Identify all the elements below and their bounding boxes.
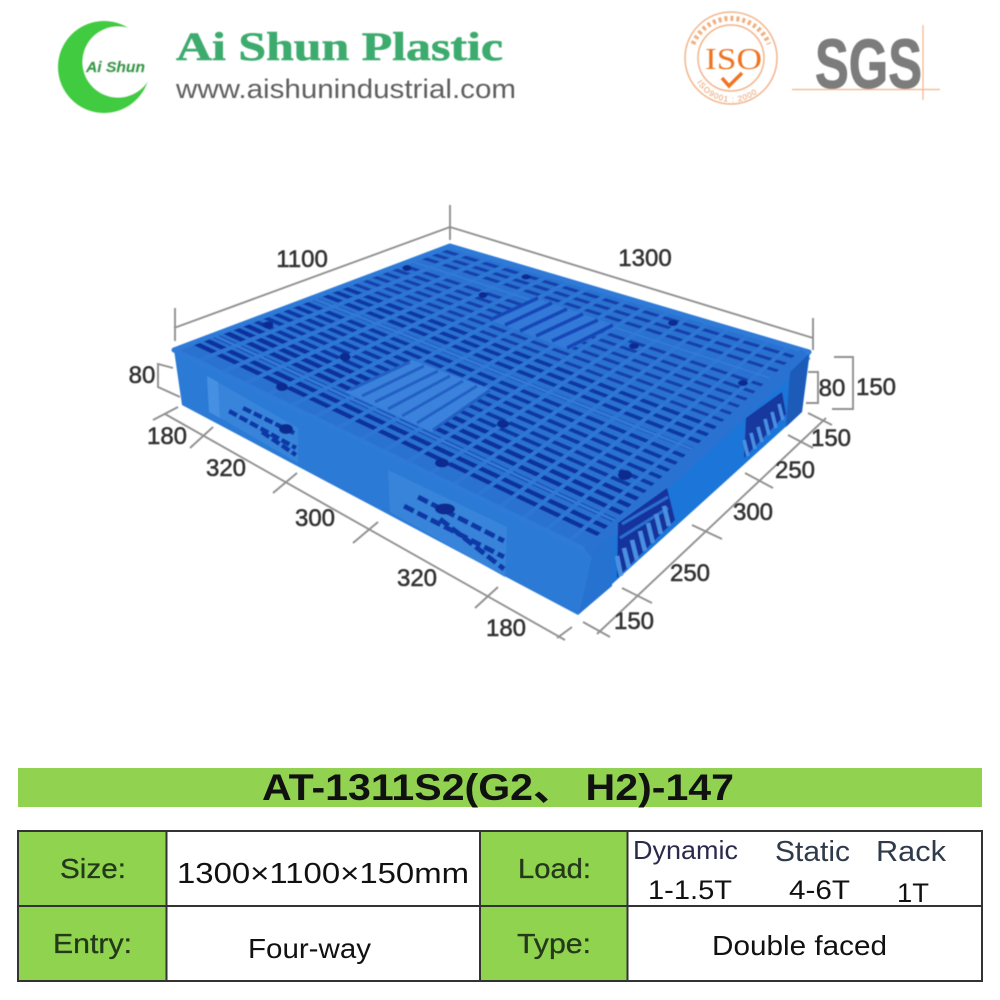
load row xyxy=(518,835,947,908)
website address: www.aishunindustrial.com xyxy=(175,74,516,104)
label cell backgrounds xyxy=(18,831,628,981)
load row: 1-1.5T xyxy=(648,875,732,905)
right deck rim band xyxy=(588,354,806,553)
deck rim xyxy=(174,246,809,553)
type row xyxy=(517,928,887,961)
entry row: Entry: xyxy=(53,928,132,959)
fork opening: front left xyxy=(214,380,298,463)
type row: Double faced xyxy=(712,930,887,961)
height dimension: left 80: 80 xyxy=(129,362,155,389)
corner post shading: front xyxy=(578,532,615,615)
front edge dimensions: 320 xyxy=(397,565,437,592)
pallet illustration xyxy=(174,246,810,615)
slatted patch: centre xyxy=(345,360,492,432)
company name: Ai Shun Plastic xyxy=(176,24,503,69)
corner post: right xyxy=(786,354,809,427)
front edge dimensions xyxy=(147,407,572,642)
side edge dimensions xyxy=(583,413,851,637)
ISO certification seal: ISO9001 : 2000 xyxy=(696,80,757,102)
entry row xyxy=(53,928,371,964)
front edge dimensions: 180 xyxy=(147,423,187,450)
top dimension: 1300: 1300 xyxy=(618,245,672,272)
type row: Type: xyxy=(517,928,591,959)
height dimension: right 150 xyxy=(832,357,896,409)
size row xyxy=(60,853,469,890)
side edge dimensions: 250 xyxy=(670,560,710,587)
load row: Dynamic xyxy=(633,835,738,865)
side edge dimensions: 150 xyxy=(614,608,654,635)
top dimension: 1300 xyxy=(450,227,813,350)
slatted patch: back xyxy=(490,298,615,350)
load row: 1T xyxy=(897,878,929,908)
front long face xyxy=(174,350,592,615)
logo: Ai Shun crescent xyxy=(58,21,154,113)
size row: Size: xyxy=(60,853,126,884)
ISO certification seal xyxy=(684,10,778,106)
front edge dimensions: 180 xyxy=(486,615,526,642)
height dimension: right 80 xyxy=(806,372,845,403)
height dimension: right 150: 150 xyxy=(856,374,896,401)
logo: Ai Shun crescent: Ai Shun xyxy=(85,59,145,76)
size row: 1300×1100×150mm xyxy=(177,858,469,890)
model title bar xyxy=(18,767,982,808)
load row: Load: xyxy=(518,853,591,884)
right short face xyxy=(578,352,810,615)
fork opening: side front xyxy=(617,488,675,578)
fork opening: side rear xyxy=(744,392,786,458)
deck holes xyxy=(262,265,748,480)
table grid xyxy=(18,831,982,981)
load row: Static xyxy=(775,836,850,868)
side edge dimensions: 300 xyxy=(733,499,773,526)
ISO certification seal: ISO xyxy=(705,41,762,76)
side edge dimensions: 250 xyxy=(775,457,815,484)
height dimension: left 80 xyxy=(129,362,180,397)
front edge dimensions: 320 xyxy=(206,455,246,482)
height dimension: right 80: 80 xyxy=(819,375,845,402)
dimension lines and labels xyxy=(129,205,896,642)
load row: 4-6T xyxy=(789,875,850,905)
specification table xyxy=(18,831,982,981)
corner post shading: left xyxy=(207,376,220,418)
entry row: Four-way xyxy=(248,933,371,964)
SGS mark: SGS xyxy=(815,25,922,103)
model title bar: AT-1311S2(G2、 H2)-147 xyxy=(262,767,734,808)
side edge dimensions: 150 xyxy=(811,425,851,452)
deck slots and ribs xyxy=(194,250,801,542)
top deck xyxy=(174,246,809,553)
top dimension: 1100: 1100 xyxy=(276,246,328,273)
top dimension: 1100 xyxy=(174,205,450,341)
front edge dimensions: 300 xyxy=(295,505,335,532)
load row: Rack xyxy=(876,836,947,868)
fork opening: front right xyxy=(388,470,507,577)
